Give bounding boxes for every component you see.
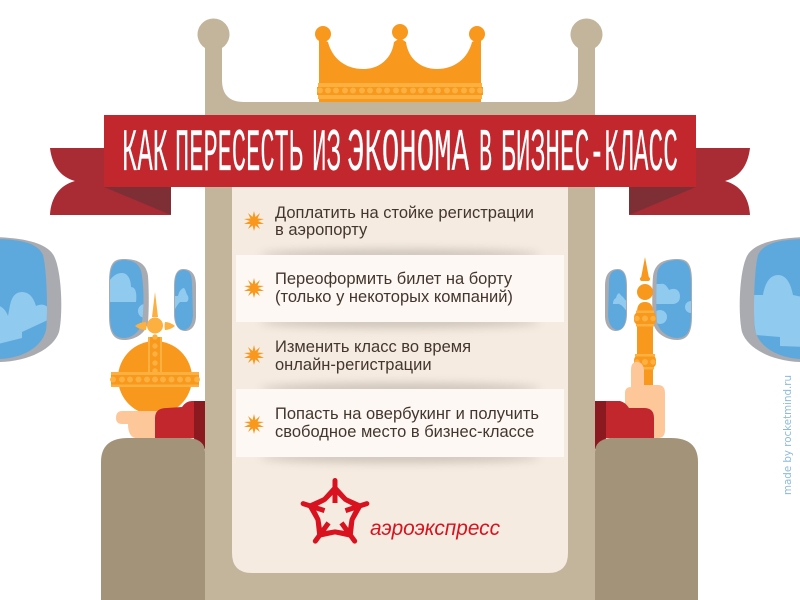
window: small left near <box>108 259 152 340</box>
title <box>122 121 678 189</box>
row 2 background <box>236 255 564 322</box>
title: ИЗ <box>312 121 341 189</box>
left seat <box>101 438 205 600</box>
item 4: Попасть на овербукинг и получить <box>275 405 539 423</box>
row 4 background <box>236 389 564 457</box>
cream content panel <box>232 180 568 573</box>
orb held in left hand <box>110 292 200 415</box>
logo: aeroexpress <box>297 478 500 550</box>
banner <box>104 115 696 187</box>
seat panel with crown-shaped posts <box>198 18 602 600</box>
logo star <box>297 478 373 550</box>
item 2: (только у некоторых компаний) <box>275 288 513 306</box>
window: large right <box>740 237 800 362</box>
item 3 <box>244 338 471 374</box>
left hand <box>116 411 158 438</box>
window: small right far <box>605 269 627 331</box>
item 1: в аэропорту <box>275 221 368 239</box>
ribbon tail left <box>50 148 171 215</box>
window: small left far <box>173 269 196 331</box>
item 4: свободное место в бизнес-классе <box>275 423 534 441</box>
right seat <box>595 438 698 600</box>
left sleeve <box>155 401 205 449</box>
window: small right near <box>652 259 692 340</box>
window: large left <box>0 237 61 362</box>
credit: made by rocketmind.ru <box>782 375 794 495</box>
item 2: Переоформить билет на борту <box>275 270 513 288</box>
title: КАК <box>122 121 168 189</box>
sceptre held in right hand <box>634 257 656 390</box>
item 1 <box>244 204 534 239</box>
logo wordmark: аэроэкспресс <box>370 517 500 540</box>
row shadows <box>260 249 540 463</box>
right hand <box>625 362 665 438</box>
item 1: Доплатить на стойке регистрации <box>275 204 534 222</box>
ribbon tail right <box>629 148 750 215</box>
item 3: Изменить класс во время <box>275 338 471 356</box>
title: ЭКОНОМА <box>347 121 469 189</box>
item 4 <box>244 405 539 441</box>
right sleeve <box>595 401 654 449</box>
item 2 <box>244 270 513 306</box>
title: В <box>479 121 492 189</box>
crown <box>315 24 485 102</box>
title: ПЕРЕСЕСТЬ <box>175 121 303 189</box>
item 3: онлайн-регистрации <box>275 356 432 374</box>
